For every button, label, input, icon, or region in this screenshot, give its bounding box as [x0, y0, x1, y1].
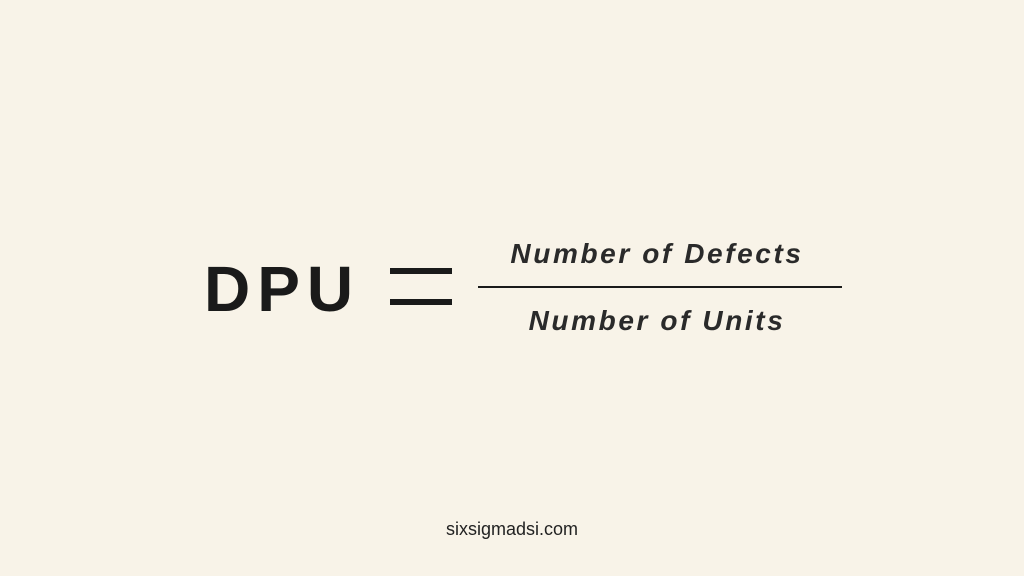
title: DPU: DPU: [204, 253, 360, 325]
fraction line: [478, 286, 842, 288]
denominator: Number of Units: [529, 305, 785, 336]
footer url: sixsigmadsi.com: [446, 519, 578, 539]
numerator: Number of Defects: [510, 238, 804, 269]
equals sign: [390, 268, 452, 305]
